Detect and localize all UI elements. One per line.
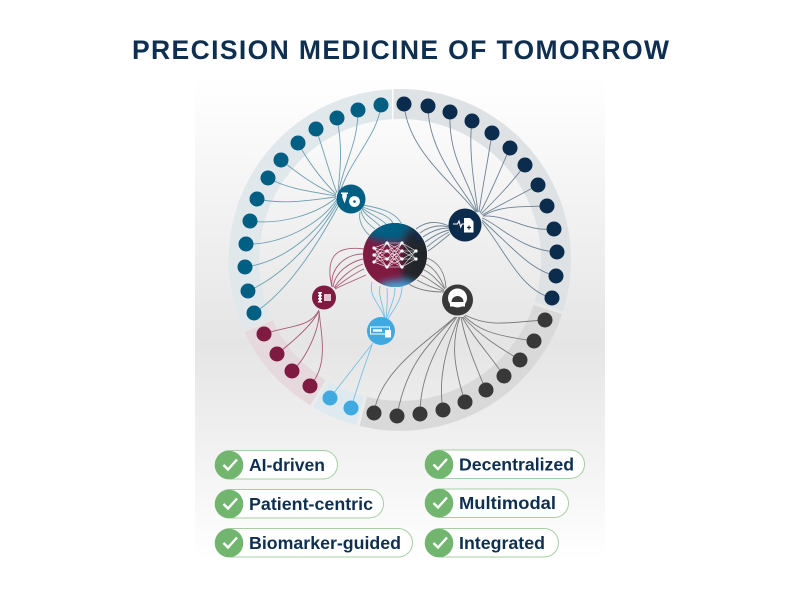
label: Patient-centric	[249, 494, 373, 514]
hub: maroon genomics	[312, 286, 336, 310]
check badge	[425, 489, 453, 517]
icon: test tube	[341, 192, 348, 204]
label: Biomarker-guided	[249, 533, 401, 553]
icon: document with plus	[464, 218, 474, 232]
label: Multimodal	[459, 493, 556, 513]
dark grey connector lines	[374, 315, 545, 416]
icon: scanner	[448, 288, 467, 308]
ring segment: teal	[229, 89, 392, 330]
teal hub to centre	[360, 205, 401, 235]
title: PRECISION MEDICINE OF TOMORROW	[132, 35, 669, 65]
check badge	[425, 450, 453, 479]
check badge	[215, 529, 243, 557]
maroon hub to centre	[330, 248, 366, 289]
pill: Biomarker-guided	[215, 528, 412, 557]
network nodes	[372, 241, 418, 269]
maroon connector lines	[264, 310, 322, 386]
central AI hub	[363, 223, 427, 287]
light blue hub to centre	[371, 282, 402, 320]
label: AI-driven	[249, 455, 325, 475]
background panel	[195, 78, 605, 560]
pill: Integrated	[425, 528, 558, 557]
ring segment: maroon	[245, 320, 326, 405]
hub: dark imaging scanner	[442, 284, 473, 316]
icon: device card	[370, 327, 391, 338]
icon: disc	[349, 196, 360, 207]
pill: Decentralized	[425, 450, 584, 479]
colour blends	[366, 223, 427, 287]
hub: teal lab samples	[336, 184, 366, 214]
icon: pulse line	[453, 221, 464, 227]
light blue connector lines	[330, 343, 373, 408]
ring segment: light blue	[313, 382, 364, 425]
label: Integrated	[459, 533, 545, 553]
label: Decentralized	[459, 454, 574, 474]
check badge	[425, 529, 453, 557]
dark hub to centre	[409, 258, 446, 292]
pill: AI-driven	[215, 450, 338, 479]
dark grey dots	[366, 312, 552, 424]
network links	[374, 243, 416, 267]
segmented outer ring	[229, 89, 571, 431]
navy connector lines	[404, 104, 557, 298]
check badge	[215, 451, 243, 479]
neural network icon	[372, 241, 418, 269]
teal dots	[238, 98, 388, 320]
light blue dots	[322, 390, 358, 416]
pill: Multimodal	[425, 489, 568, 518]
hub to centre connector lines	[330, 205, 450, 320]
hub: light blue wearable	[367, 317, 395, 345]
navy hub to centre	[416, 222, 450, 251]
teal connector lines	[245, 105, 381, 313]
pill: Patient-centric	[215, 490, 384, 518]
hub: navy digital health	[448, 208, 482, 242]
ring segment: navy	[394, 89, 571, 311]
navy dots	[396, 96, 564, 306]
maroon dots	[256, 326, 318, 394]
icon: gene strip and chip	[318, 292, 331, 302]
ring segment: dark grey	[360, 305, 562, 431]
check badge	[215, 490, 243, 518]
hub base	[363, 223, 427, 287]
